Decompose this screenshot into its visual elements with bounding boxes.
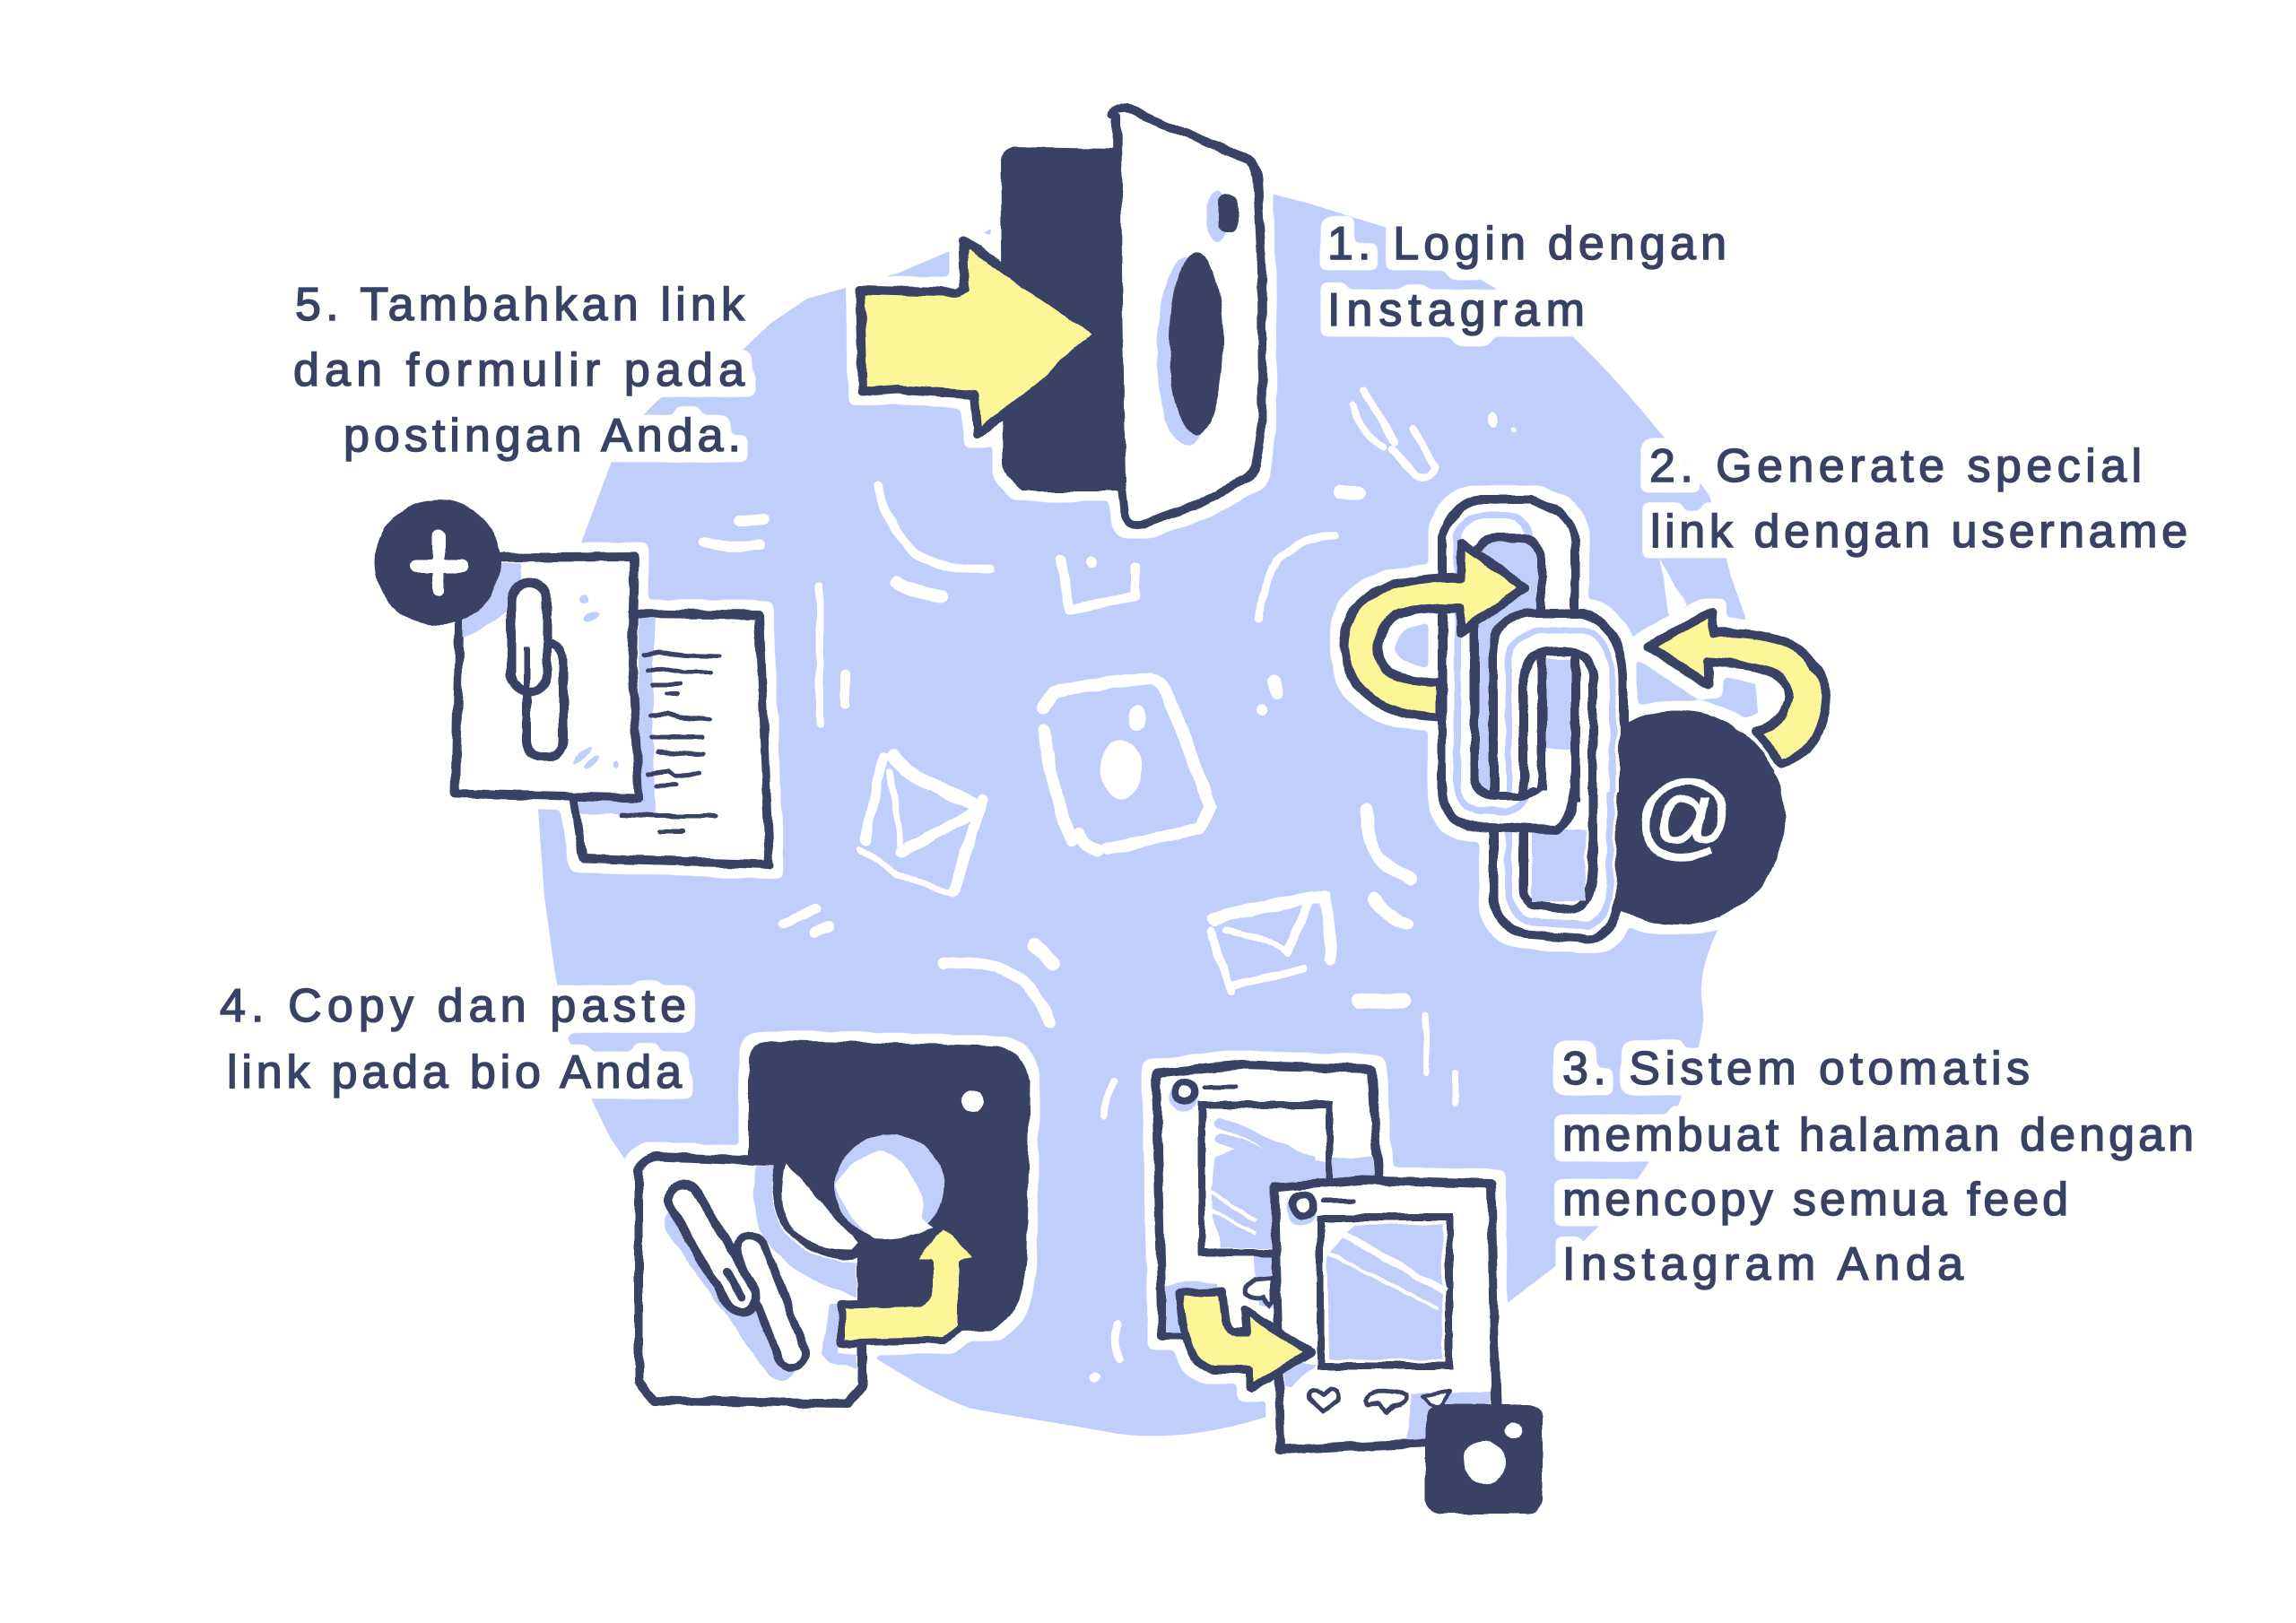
caption 5: add link and form: 5. Tambahkan link (295, 279, 745, 331)
like icon (1309, 1390, 1337, 1411)
icon 1: login door with arrow (860, 108, 1263, 525)
comment icon (1367, 1390, 1406, 1412)
caption 3: automatic system: membuat halaman dengan (1562, 1109, 2194, 1161)
crescent (783, 1164, 858, 1250)
link icon (511, 583, 563, 757)
camera lens (1170, 252, 1223, 435)
caption 2: generate link: 2. Generate special (1649, 440, 2142, 492)
back card shadows (1166, 1083, 1375, 1333)
icon 5: documents with link and plus (375, 499, 770, 864)
caption 2: generate link: link dengan username (1650, 506, 2187, 558)
second clip base (1493, 613, 1623, 939)
front photo (1320, 1218, 1449, 1366)
background blob (538, 194, 1759, 1436)
doodle: arcs and strokes (703, 486, 1455, 1358)
front card (1274, 1180, 1496, 1450)
at sign circle (1570, 710, 1790, 925)
caption 4: copy and paste (220, 980, 686, 1098)
clip shadow (682, 1224, 780, 1363)
instagram logo (1426, 1404, 1543, 1514)
back paper shadow (578, 619, 656, 814)
front shadows (1284, 1196, 1491, 1440)
back header (1176, 1082, 1196, 1102)
caption 3: automatic system: Instagram Anda (1562, 1238, 1963, 1290)
dark instagram square (749, 1040, 1030, 1332)
back photo (1202, 1105, 1329, 1253)
doodle: envelope left (859, 755, 983, 892)
yellow arrow up (841, 1224, 979, 1343)
first clip band (1442, 499, 1575, 829)
caption 5: add link and form: dan formulir pada (293, 344, 744, 396)
yellow arrow right (1648, 612, 1827, 762)
back comment icon (1247, 1278, 1272, 1306)
second clip inner (1524, 651, 1593, 910)
icon 3: copied feed cards with instagram logo (1156, 1065, 1543, 1514)
at sign circle: @ (1635, 760, 1734, 869)
first clip inner (1474, 538, 1542, 796)
dark door back (1001, 147, 1126, 491)
front paper (456, 557, 639, 798)
caption 4: copy and paste: link pada bio Anda (227, 1046, 682, 1098)
paper marks (571, 595, 619, 771)
second clip top band (1493, 613, 1623, 793)
open device panel (1113, 108, 1263, 525)
back card (1156, 1065, 1378, 1336)
back paper (574, 613, 770, 864)
clip link (683, 1199, 792, 1354)
front header (1293, 1195, 1313, 1215)
caption 1: login: 1. Login dengan (1327, 218, 1726, 270)
caption 5: add link and form: postingan Anda. (344, 410, 741, 462)
card shadows (752, 1166, 857, 1369)
yellow arrow left (1344, 543, 1525, 717)
send icon (1422, 1391, 1451, 1408)
doodle: instagram outline (1043, 678, 1210, 851)
caption 3: automatic system (1562, 1043, 2194, 1290)
doodle: dots (1087, 412, 1687, 1384)
blue shadows (1206, 191, 1230, 241)
instagram dot (962, 1090, 984, 1112)
caption 2: generate link (1649, 440, 2187, 558)
caption 5: add link and form (293, 279, 745, 462)
icon 2: linked clips with at sign (1344, 499, 1827, 939)
icon 4: copy link to instagram (639, 1040, 1030, 1403)
caption 3: automatic system: 3. Sistem otomatis (1562, 1043, 2030, 1095)
caption 1: login (1327, 218, 1726, 336)
front card (639, 1157, 863, 1403)
camera dot (1219, 194, 1238, 232)
lens (835, 1134, 944, 1239)
caption 3: automatic system: mencopy semua feed (1562, 1174, 2068, 1226)
second clip shadow (1509, 681, 1613, 925)
text lines (622, 652, 719, 830)
yellow curved arrow (1179, 1291, 1311, 1389)
decorative white doodles on blob (703, 390, 1687, 1384)
doodle: envelope right (1210, 896, 1331, 991)
yellow arrow (860, 240, 1100, 434)
first clip shadow (1457, 516, 1529, 812)
caption 4: copy and paste: 4. Copy dan paste (220, 980, 686, 1032)
doodle: small clip (1352, 390, 1435, 477)
caption 1: login: Instagram (1327, 284, 1585, 336)
plus circle (375, 499, 500, 625)
circle shadow (462, 563, 521, 637)
